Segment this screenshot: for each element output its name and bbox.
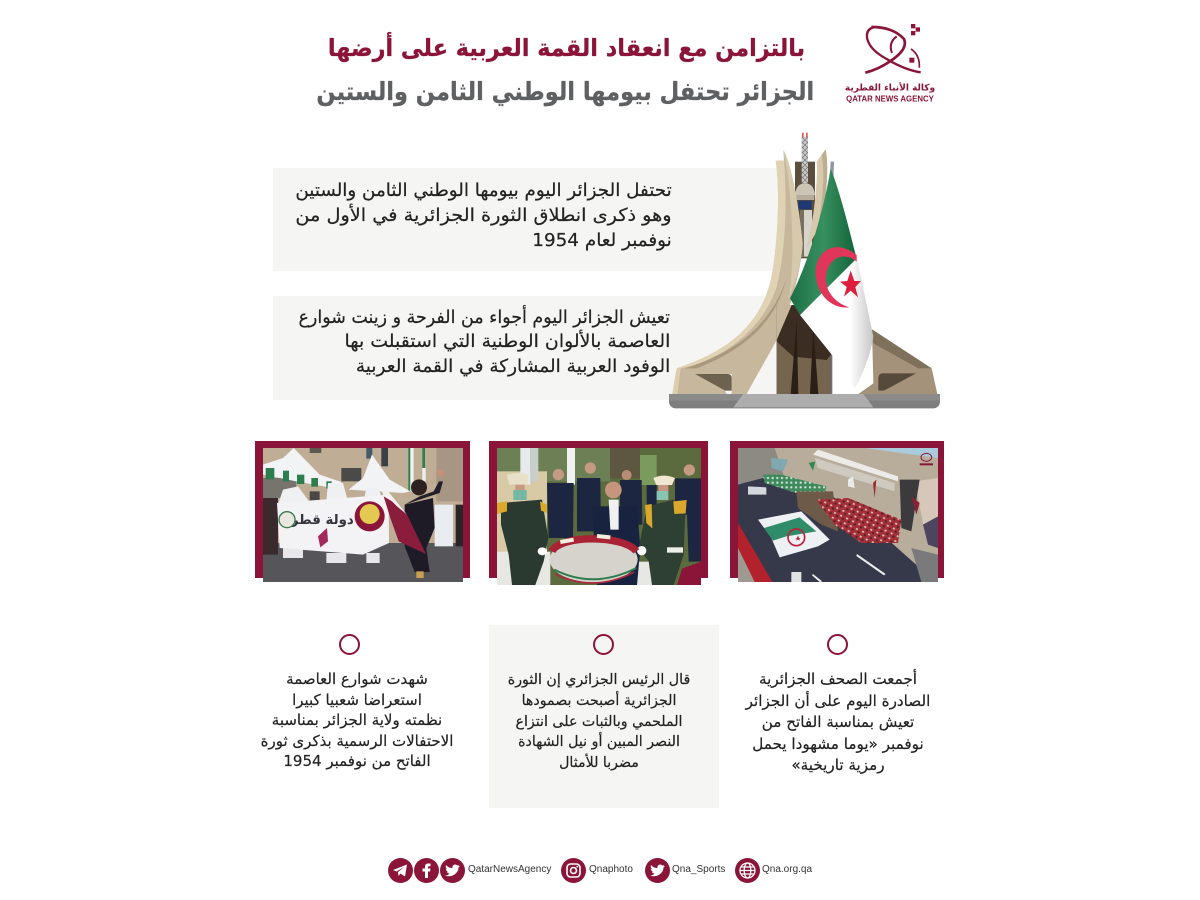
- logo: Qatar News Agency: وكالة الأنباء القطرية: [845, 81, 935, 93]
- photo: aerial view of parade with large flag: [738, 448, 938, 582]
- label: QatarNewsAgency: QatarNewsAgency: [468, 864, 551, 875]
- logo: Qatar News Agency: QATAR NEWS AGENCY: [846, 95, 935, 104]
- dark lower core: [777, 305, 832, 394]
- frame: photo two backing: [489, 441, 708, 578]
- tents: [263, 448, 410, 493]
- base platform: [669, 394, 940, 408]
- banner with text: دولة قطر: [290, 513, 354, 528]
- text block: right column: رمزية تاريخية»: [791, 756, 885, 774]
- illustration: Maqam Echahid monument with Algerian flag: [669, 132, 940, 408]
- text block: left column: الاحتفالات الرسمية بذكرى ثورة: [261, 732, 453, 750]
- frame: photo three backing: [730, 441, 944, 578]
- label: Qna_Sports: Qna_Sports: [672, 864, 725, 875]
- text block: center column: النصر المبين أو نيل الشهادة: [518, 734, 680, 750]
- footer: social media links: [388, 858, 812, 883]
- label: Qnaphoto: Qnaphoto: [589, 864, 633, 875]
- marker: right column circle: [827, 634, 848, 655]
- garden background: [497, 448, 657, 585]
- icon: twitter sports: [645, 858, 670, 883]
- right honor guard: [637, 476, 687, 585]
- icon: twitter: [440, 858, 465, 883]
- icon: globe: [735, 858, 760, 883]
- road: [263, 543, 463, 582]
- right wing: [807, 149, 937, 394]
- text block: left column: نظمته ولاية الجزائر بمناسبة: [272, 711, 442, 729]
- crowd: [263, 483, 463, 563]
- flag: [790, 168, 873, 388]
- marker: center column circle: [593, 634, 614, 655]
- text block: right column: أجمعت الصحف الجزائرية: [759, 670, 917, 688]
- text line: نوفمبر لعام 1954: [533, 230, 672, 251]
- text block: left column: استعراضا شعبيا كبيرا: [292, 691, 422, 709]
- tent bunting: [266, 468, 332, 489]
- label: Qna.org.qa: Qna.org.qa: [762, 864, 812, 875]
- woman with Qatar flag: [379, 470, 444, 578]
- panel: center column background: [489, 625, 719, 808]
- green marching groups: [748, 475, 826, 495]
- building windows and flags: [263, 448, 463, 501]
- text block: right column: تعيش بمناسبة الفاتح من: [762, 713, 914, 731]
- text block: center column: [508, 672, 690, 771]
- large Algerian flag: [758, 511, 830, 557]
- text line: وهو ذكرى انطلاق الثورة الجزائرية في الأول من: [296, 205, 672, 226]
- left wing: [672, 150, 803, 394]
- red carpet corner: [677, 562, 701, 585]
- president: [592, 482, 640, 585]
- text block: right column: نوفمبر «يوما مشهودا يحمل: [752, 734, 924, 752]
- icon: instagram: [561, 858, 586, 883]
- marker: left column circle: [339, 634, 360, 655]
- heading: subtitle: الجزائر تحتفل بيومها الوطني الثامن والستين: [316, 77, 814, 106]
- text line: تحتفل الجزائر اليوم بيومها الوطني الثامن والستين: [296, 180, 672, 201]
- text block: left column: الفاتح من نوفمبر 1954: [283, 752, 431, 770]
- text line: العاصمة بالألوان الوطنية التي استقبلت بها: [344, 331, 670, 352]
- panel: intro text two: [273, 296, 780, 400]
- central tower: [795, 133, 815, 258]
- text block: center column: مضربا للأمثال: [559, 755, 639, 771]
- text block: left column: [261, 670, 453, 770]
- photo: parade with Qatar banner: [263, 448, 463, 582]
- dignitaries in dark suits: [547, 462, 701, 562]
- frame: photo one backing: [255, 441, 470, 578]
- text block: left column: شهدت شوارع العاصمة: [286, 670, 428, 688]
- text line: تعيش الجزائر اليوم أجواء من الفرحة و زينت شوارع: [298, 307, 670, 328]
- watermark logo: [920, 453, 933, 465]
- text block: center column: الملحمي وبالثبات على انتزاع: [516, 714, 682, 730]
- text block: right column: [744, 668, 930, 774]
- red marching band: [796, 491, 901, 543]
- text block: center column: قال الرئيس الجزائري إن الثورة: [508, 672, 690, 688]
- wreath: [550, 536, 638, 583]
- red carpet and road markings: [738, 523, 886, 582]
- photo: president with wreath and honor guard: [497, 448, 701, 585]
- banner with text: [277, 495, 389, 555]
- left honor guard: [497, 473, 548, 585]
- small flags: [771, 458, 920, 515]
- panel: intro text one: [273, 168, 780, 271]
- heading: main title: بالتزامن مع انعقاد القمة العربية على أرضها: [328, 34, 805, 62]
- buildings and beach: [738, 448, 938, 582]
- icon: facebook: [414, 858, 439, 883]
- text block: center column: الجزائرية أصبحت بصمودها: [522, 693, 676, 709]
- text line: الوفود العربية المشاركة في القمة العربية: [356, 356, 670, 377]
- icon: telegram: [388, 858, 413, 883]
- logo: Qatar News Agency: [845, 24, 935, 104]
- text block: right column: الصادرة اليوم على أن الجزائر: [746, 692, 930, 710]
